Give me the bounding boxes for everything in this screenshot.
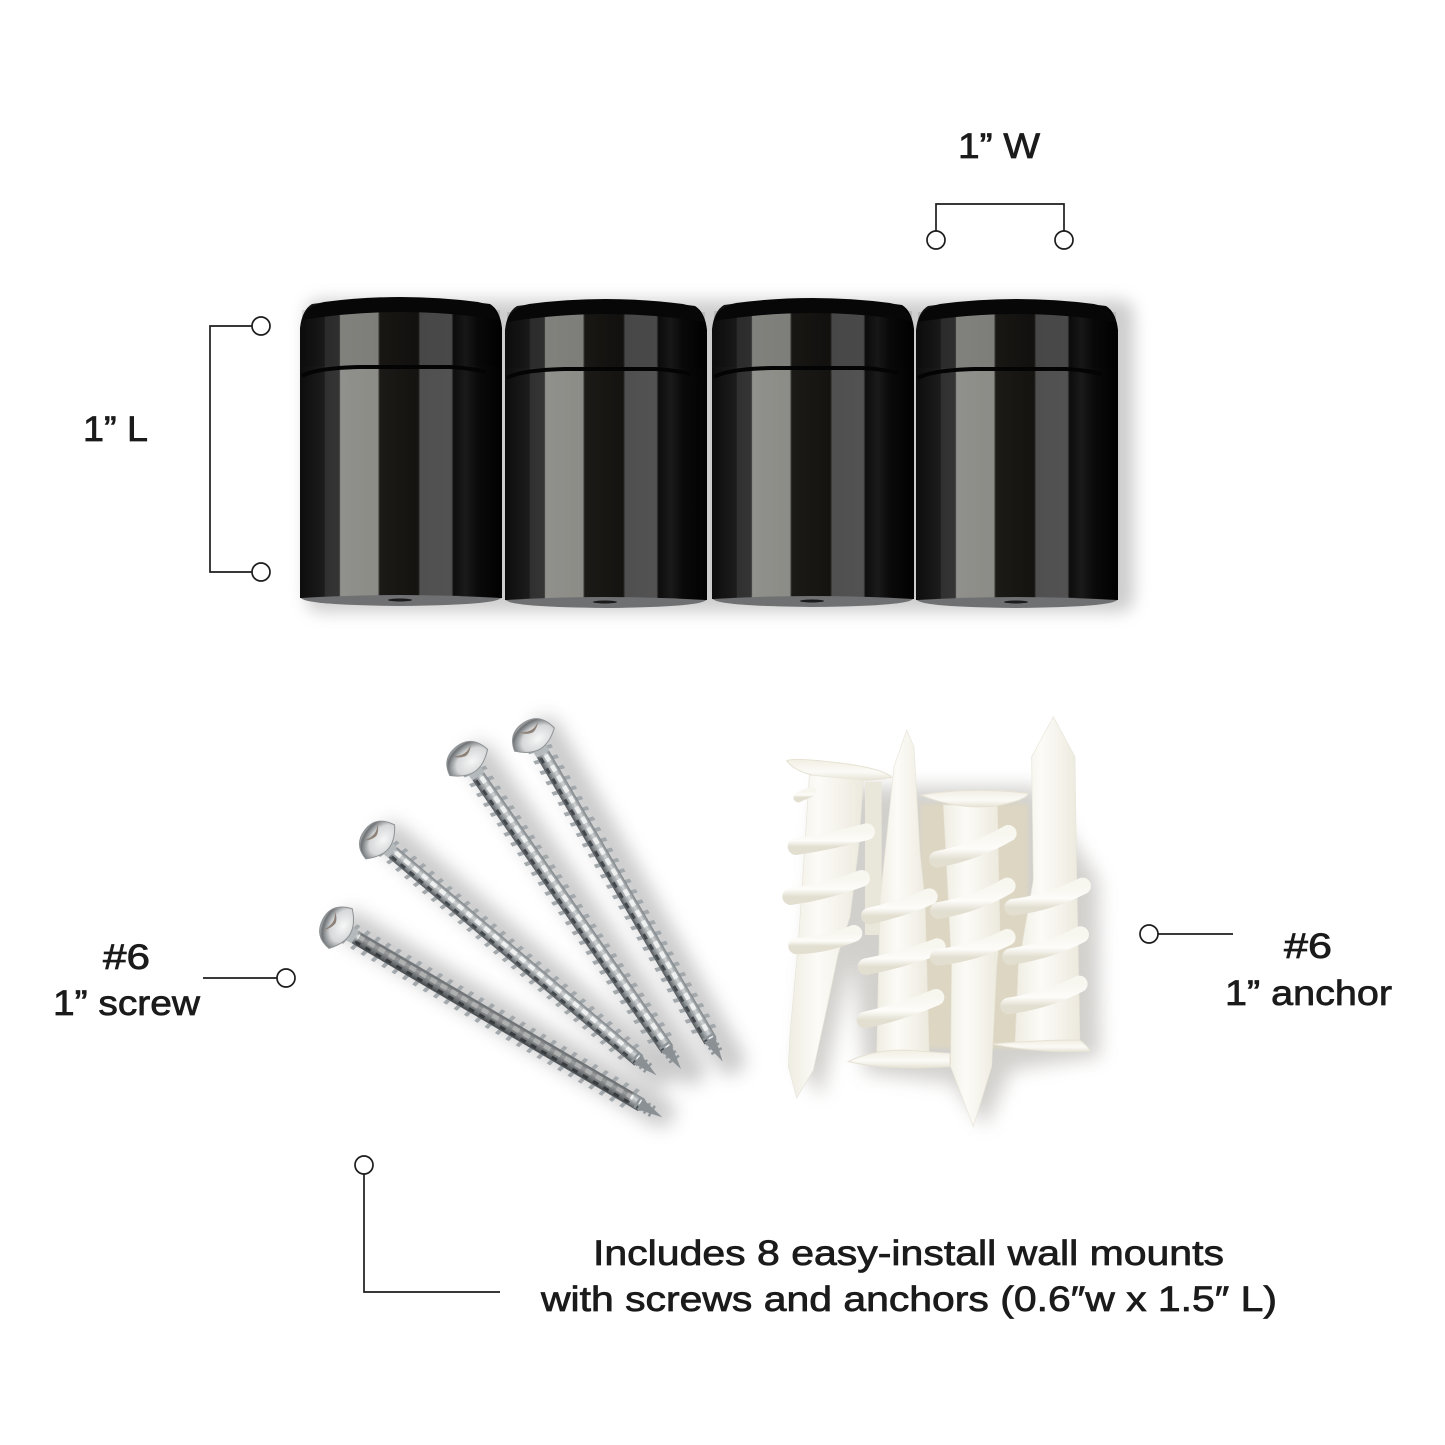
leader: screw xyxy=(203,969,295,987)
label: 1 inch length: 1” L xyxy=(83,410,148,449)
bracket: length xyxy=(210,317,270,581)
product: four black cylinder standoffs xyxy=(300,297,1134,612)
label: number 6 screw: #6 xyxy=(103,938,150,977)
label: number 6 anchor xyxy=(1225,927,1392,1013)
callout: includes text xyxy=(540,1234,1277,1319)
label: 1 inch width: 1” W xyxy=(958,127,1040,166)
label: number 6 screw: 1” screw xyxy=(53,984,201,1023)
callout: includes text: with screws and anchors (0.6″w x 1.5″ L) xyxy=(540,1280,1277,1319)
callout: includes text: Includes 8 easy-install wall mounts xyxy=(593,1234,1224,1273)
product: four chrome screws xyxy=(312,711,743,1137)
leader: includes callout xyxy=(355,1156,500,1292)
bracket: width xyxy=(927,204,1073,249)
label: number 6 anchor: #6 xyxy=(1284,927,1332,966)
label: number 6 screw xyxy=(53,938,201,1023)
product: four white plastic anchors xyxy=(787,717,1100,1127)
leader: anchor xyxy=(1140,925,1233,943)
label: number 6 anchor: 1” anchor xyxy=(1225,974,1392,1013)
